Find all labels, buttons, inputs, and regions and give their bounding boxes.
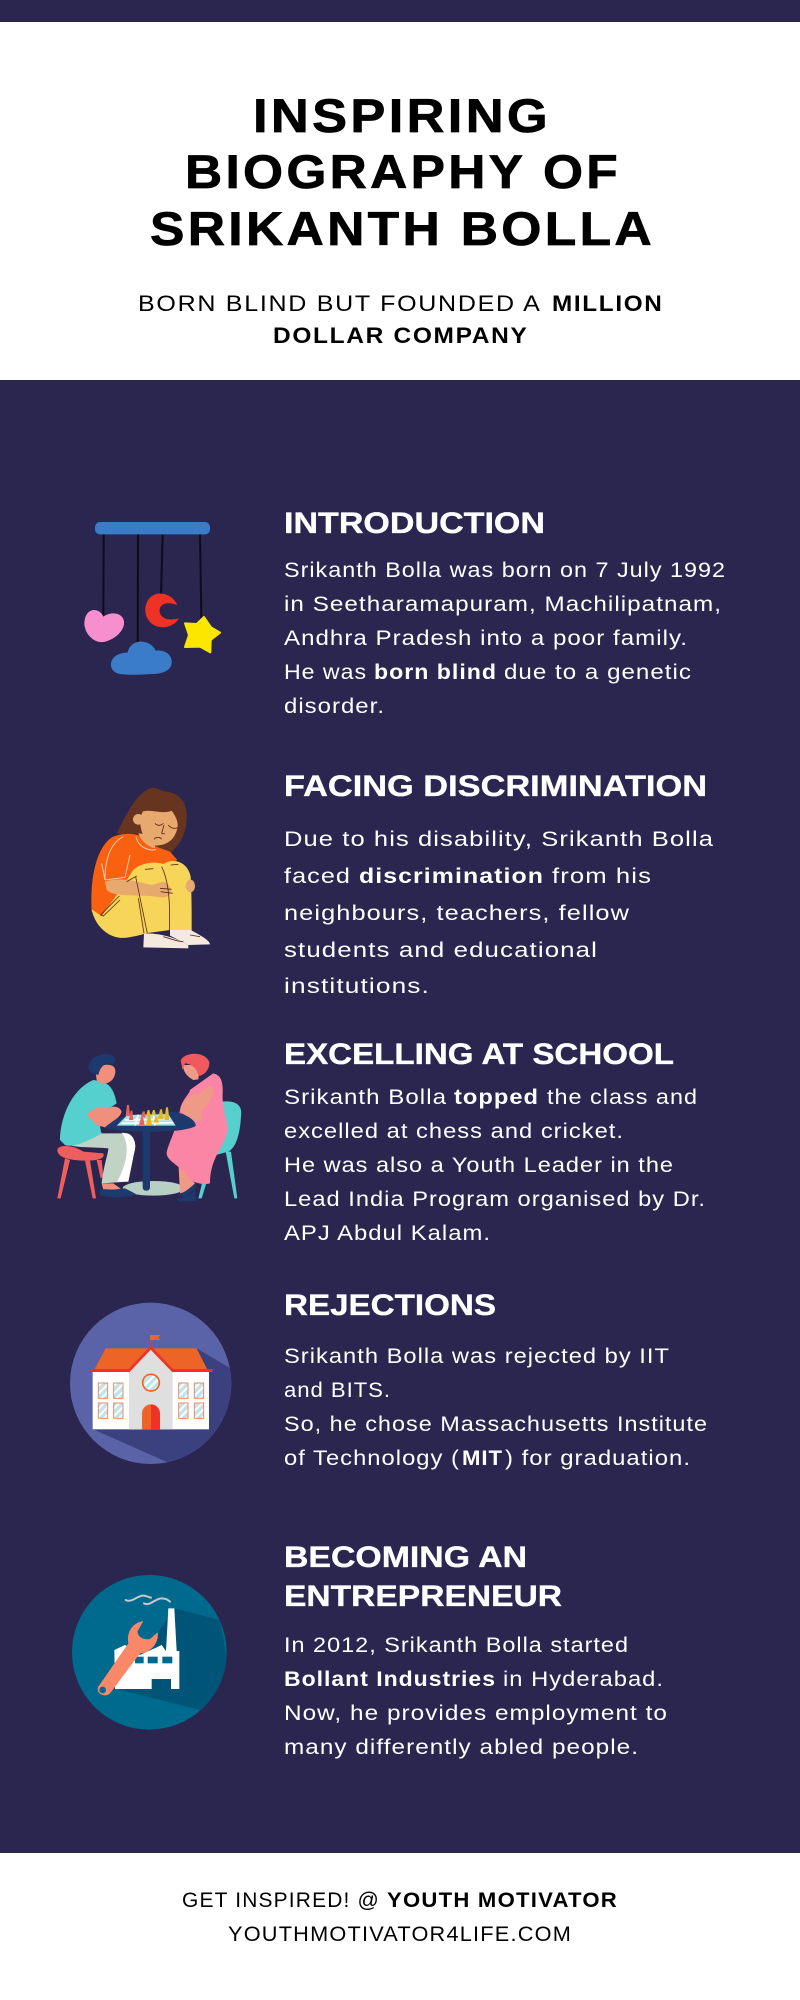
title: INSPIRING xyxy=(253,89,551,142)
text: excelling at school body xyxy=(284,1086,706,1245)
text: facing discrimination body: faced xyxy=(284,865,351,888)
text: excelling at school body: He was also a Youth Leader in the xyxy=(284,1154,674,1177)
panel: excelling at school xyxy=(57,1038,706,1245)
title: SRIKANTH BOLLA xyxy=(150,202,655,255)
heading: excelling at school: EXCELLING AT SCHOOL xyxy=(284,1038,674,1071)
text: introduction body: Srikanth Bolla was born on 7 July 1992 xyxy=(284,559,726,582)
text: footer credit: YOUTHMOTIVATOR4LIFE.COM xyxy=(228,1922,572,1946)
subtitle: DOLLAR COMPANY xyxy=(273,323,528,348)
text: facing discrimination body xyxy=(284,828,714,998)
title: BIOGRAPHY OF xyxy=(185,145,621,198)
text: rejections body: So, he chose Massachusetts Institute xyxy=(284,1413,708,1436)
heading: facing discrimination: FACING DISCRIMINATION xyxy=(284,770,707,803)
subtitle xyxy=(138,291,664,348)
panel: facing discrimination xyxy=(91,770,714,998)
text: introduction body: due to a genetic xyxy=(504,661,692,684)
text: becoming an entrepreneur body: Now, he provides employment to xyxy=(284,1702,668,1725)
text: footer credit: YOUTH MOTIVATOR xyxy=(387,1888,618,1912)
panel: rejections xyxy=(70,1294,706,1470)
icon: school building in circle xyxy=(70,1302,232,1464)
text: facing discrimination body: neighbours, teachers, fellow xyxy=(284,902,630,925)
heading: becoming an entrepreneur: BECOMING AN xyxy=(284,1541,527,1574)
subtitle: MILLION xyxy=(552,291,664,316)
text: introduction body: born blind xyxy=(374,661,497,684)
panel: becoming an entrepreneur xyxy=(72,1541,668,1759)
heading: becoming an entrepreneur xyxy=(284,1541,562,1613)
text: rejections body: ) for graduation. xyxy=(505,1447,691,1470)
text: becoming an entrepreneur body xyxy=(284,1634,668,1759)
title xyxy=(150,89,655,255)
text: excelling at school body: APJ Abdul Kalam. xyxy=(284,1222,491,1245)
text: facing discrimination body: from his xyxy=(552,865,652,888)
heading: rejections: REJECTIONS xyxy=(284,1289,496,1322)
text: rejections body: and BITS. xyxy=(284,1379,391,1402)
text: introduction body: in Seetharamapuram, Machilipatnam, xyxy=(284,593,722,616)
text: introduction body xyxy=(284,559,726,718)
text: becoming an entrepreneur body: many differently abled people. xyxy=(284,1736,639,1759)
text: facing discrimination body: discrimination xyxy=(359,865,544,888)
panel: title header xyxy=(0,22,800,380)
text: footer credit xyxy=(182,1888,618,1946)
text: excelling at school body: excelled at chess and cricket. xyxy=(284,1120,624,1143)
text: excelling at school body: Lead India Program organised by Dr. xyxy=(284,1188,706,1211)
text: introduction body: Andhra Pradesh into a poor family. xyxy=(284,627,688,650)
text: facing discrimination body: students and educational xyxy=(284,939,598,962)
text: rejections body: of Technology ( xyxy=(284,1447,460,1470)
text: rejections body xyxy=(284,1345,708,1470)
text: excelling at school body: topped xyxy=(454,1086,539,1109)
text: becoming an entrepreneur body: in Hyderabad. xyxy=(503,1668,664,1691)
text: excelling at school body: Srikanth Bolla xyxy=(284,1086,447,1109)
panel: footer xyxy=(0,1853,800,2000)
text: excelling at school body: the class and xyxy=(547,1086,698,1109)
icon: baby mobile xyxy=(84,522,220,675)
icon: two people playing chess xyxy=(57,1054,241,1201)
panel: introduction xyxy=(84,507,726,718)
text: introduction body: He was xyxy=(284,661,367,684)
heading: becoming an entrepreneur: ENTREPRENEUR xyxy=(284,1580,562,1613)
text: introduction body: disorder. xyxy=(284,695,385,718)
text: facing discrimination body: Due to his disability, Srikanth Bolla xyxy=(284,828,714,851)
icon: factory and wrench in circle xyxy=(72,1575,237,1730)
text: rejections body: Srikanth Bolla was rejected by IIT xyxy=(284,1345,670,1368)
heading: introduction: INTRODUCTION xyxy=(284,507,545,540)
icon: sad girl hugging knees xyxy=(91,788,210,948)
text: becoming an entrepreneur body: Bollant Industries xyxy=(284,1668,496,1691)
text: facing discrimination body: institutions. xyxy=(284,975,430,998)
text: footer credit: GET INSPIRED! @ xyxy=(182,1888,380,1912)
text: becoming an entrepreneur body: In 2012, Srikanth Bolla started xyxy=(284,1634,629,1657)
text: rejections body: MIT xyxy=(462,1447,503,1470)
subtitle: BORN BLIND BUT FOUNDED A xyxy=(138,291,542,316)
